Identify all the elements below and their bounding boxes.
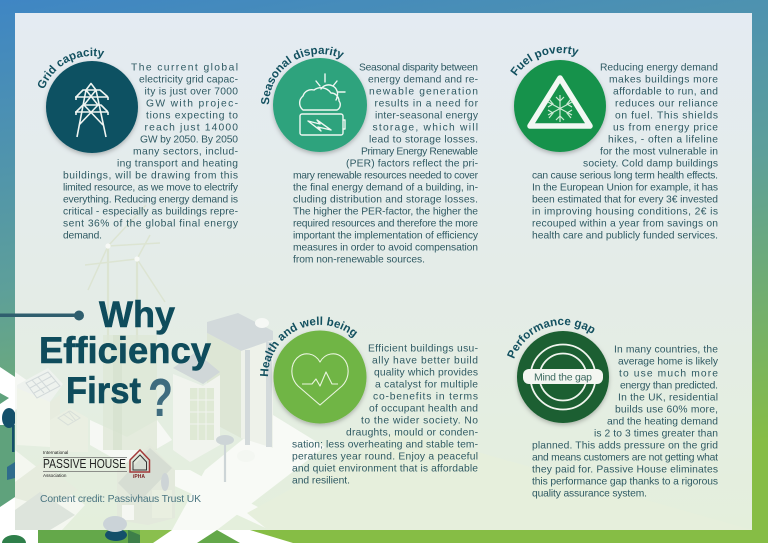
building: central tower [173,352,220,384]
panel: fuel poverty [510,46,718,242]
logo: Passive House Association: Association [43,473,67,478]
heading: fuel poverty: Fuel poverty [510,46,579,76]
text block: newable generation [369,86,478,98]
text block: this performance gap thanks to a rigorous [532,476,718,488]
text block: In the UK, residential [618,392,718,404]
text block: builds use 60% more, [615,404,718,416]
title: Why Efficiency First?: Why [99,294,175,335]
text block: affordable to run, and [613,86,718,98]
logo: Passive House Association: PASSIVE HOUSE [43,457,126,471]
text block: society. Cold damp buildings [583,158,718,170]
logo: Passive House Association [43,450,150,480]
text block: reach just 14000 [144,122,238,134]
text block: mary renewable resources needed to cover [293,170,479,182]
text block: makes buildings more [609,74,718,86]
text block: they paid for. Passive House eliminates [532,464,718,476]
icon: warning triangle with snowflake [514,60,606,152]
text block: Primary Energy Renewable [361,146,478,158]
icon: heart with pulse [274,330,366,424]
text block: GW by 2050. By 2050 [140,134,238,146]
text block: us from energy price [613,122,718,134]
text block: GW with projec- [146,98,238,110]
text block [292,344,478,486]
text block: ity is just over 7000 [144,86,238,98]
title: Why Efficiency First?: ? [148,368,173,428]
text block: to the wider society. No [361,416,478,426]
text block: results in a need for [374,98,479,110]
text block: reduces our reliance [615,98,718,110]
text block: recouped within a year from savings on [532,218,718,230]
text block: and resilient. [292,476,350,486]
text block: on fuel. This shields [615,110,718,122]
text block: planned. This adds pressure on the grid [532,440,718,452]
text block: Seasonal disparity between [359,62,478,74]
icon: mind the gap roundel [517,331,609,423]
white roads [140,470,300,530]
heading: seasonal disparity: Seasonal disparity [261,46,344,104]
building: lower left block [50,408,88,452]
text block: energy demand and re- [368,74,478,86]
text block: critical - especially as buildings repre- [63,206,238,218]
icon: pylon [46,61,138,153]
faded city illustration [15,205,752,532]
text block: hikes, - often a lifeline [608,134,718,146]
text block: The higher the PER-factor, the higher the [293,206,478,218]
text block: is 2 to 3 times greater than [594,428,718,440]
text block: Reducing energy demand [600,62,718,74]
text block: a catalyst for multiple [375,380,478,390]
text block: been estimated that for every 3€ invested [532,194,718,206]
text block: In many countries, the [614,344,718,356]
heading: performance gap: Performance gap [506,318,594,358]
background illustration: city strip outside panel [0,367,293,543]
text block: for the most vulnerable in [600,146,718,158]
text block: buildings, will be drawing from this [63,170,238,182]
text block: average home is likely [618,356,719,368]
text block [293,62,479,266]
text block: required resources and therefore the more [293,218,478,230]
building: left tower [17,368,63,403]
icon: cloud, sun and battery [273,58,367,152]
text block: in improving housing conditions, 2€ is [532,206,718,218]
logo: Passive House Association: iPHA [133,474,145,480]
text block: co-benefits in terms [373,392,478,402]
text block: quality assurance system. [532,488,647,500]
title: Why Efficiency First? [0,294,211,428]
text block: to use much more [619,368,718,380]
text block: many sectors, includ- [133,146,238,158]
building: tall back tower [207,313,273,351]
text block: from non-renewable sources. [293,254,425,266]
text block: can cause serious long term health effects. [532,170,718,182]
text block: demand. [63,230,102,242]
tree at the foot of the panel [105,529,127,541]
text block: (PER) factors reflect the pri- [346,158,478,170]
text block: the final energy demand of a building, in- [293,182,478,194]
text block: health care and publicly funded services. [532,230,718,242]
panel: health and well being [260,316,478,486]
connector line with dot [0,310,84,320]
content credit: Content credit: Passivhaus Trust UK [40,494,201,505]
text block: inter-seasonal energy [375,110,479,122]
text block: The current global [131,62,238,74]
heading: health and well being: Health and well being [260,316,358,376]
icon: mind the gap roundel: Mind the gap [534,372,592,384]
logo: Passive House Association: International [43,450,68,455]
text block: sation; less overheating and stable tem- [292,440,478,450]
panel: seasonal disparity [261,46,479,266]
text block [532,62,718,242]
text block: Efficient buildings usu- [368,344,478,354]
text block: draughts, mould or conden- [346,428,478,438]
faint back towers [103,335,157,450]
tree: back street [224,440,226,482]
text block: energy than predicted. [620,380,718,392]
heading: grid capacity: Grid capacity [38,48,104,88]
text block: storage, which will [372,122,478,134]
building: houses [117,445,175,525]
text block: tions expecting to [146,110,238,122]
text block: peratures year round. Enjoy a peaceful [292,452,478,462]
title: Why Efficiency First?: First [66,370,141,411]
text block: measures in order to avoid compensation [293,242,478,254]
text block: and means customers are not getting what [532,452,718,464]
text block [63,62,239,242]
text block: cluding distribution and storage losses. [293,194,478,206]
text block: everything. Reducing energy demand is [63,194,238,206]
text block: ally have better build [372,356,478,366]
text block: important the implementation of efficiency [293,230,479,242]
text block: limited resource, as we move to electrify [63,182,239,194]
text block: and the heating demand [607,416,718,428]
panel: performance gap [506,318,719,500]
text block: ing transport and heating [117,158,238,170]
text block: of occupant health and [369,404,478,414]
text block [532,344,719,500]
text block: electricity grid capac- [139,74,238,86]
text block: quality which provides [374,368,478,378]
text block: sent 36% of the global final energy [63,218,239,230]
text block: and quiet environment that is affordable [292,464,478,474]
text block: In the European Union for example, it has [532,182,718,194]
text block: lead to storage losses. [369,134,478,146]
title: Why Efficiency First?: Efficiency [39,330,211,371]
panel: grid capacity [38,48,239,242]
wind turbines [85,205,165,340]
